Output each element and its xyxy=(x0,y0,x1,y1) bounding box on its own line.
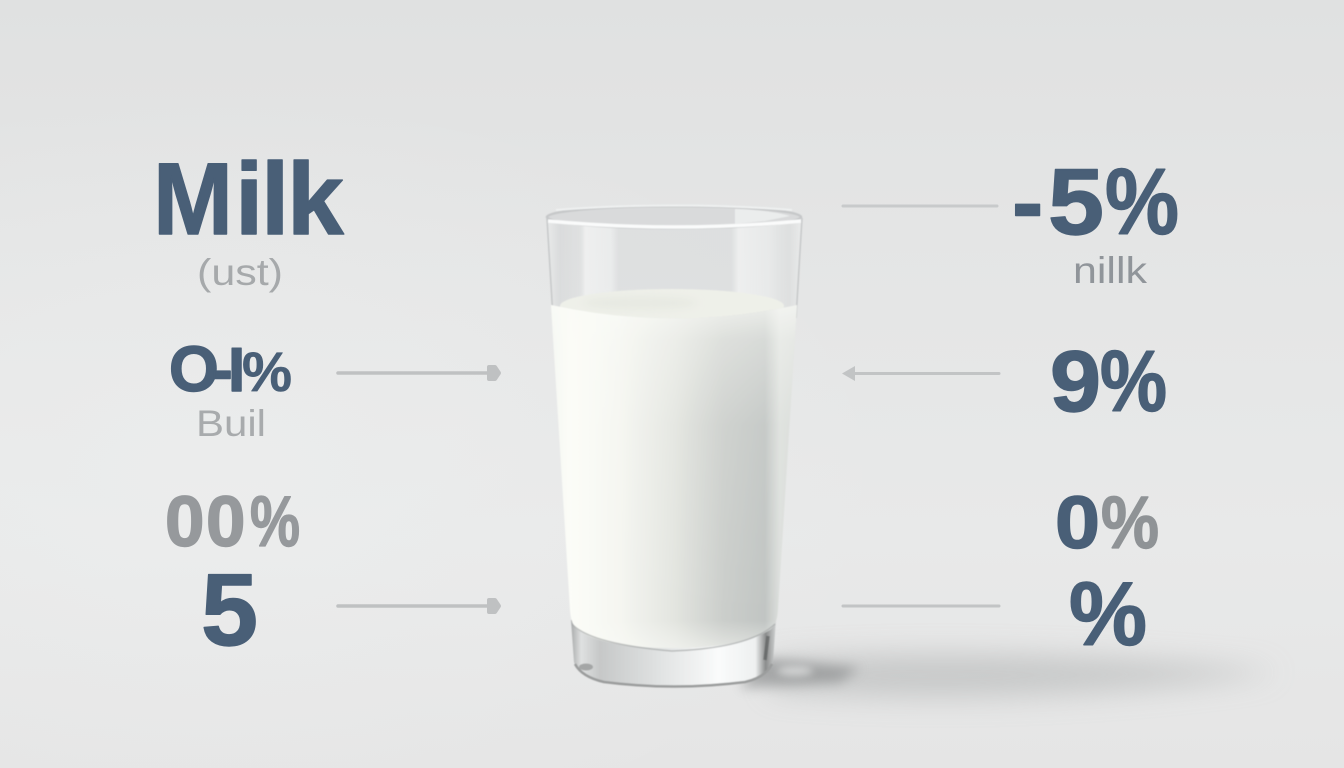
stat: 9%: 9 xyxy=(1050,334,1101,430)
stat: 9%: % xyxy=(1100,334,1167,430)
stat: O-I% xyxy=(169,333,292,405)
stat: -5%: - xyxy=(1012,149,1043,254)
label: Buil: Buil xyxy=(196,403,266,444)
stat: O-I%: -I xyxy=(212,336,245,405)
panel: left statistics xyxy=(153,142,344,667)
stat: -5%: 5 xyxy=(1048,149,1104,254)
stat: O-I%: O xyxy=(169,333,219,405)
icon: glass of milk xyxy=(547,206,802,686)
glass shadow xyxy=(740,654,1280,697)
arrow: middle right pointing to glass xyxy=(842,366,999,381)
arrow: upper left pointing to glass xyxy=(338,367,499,379)
arrow: lower left pointing to glass xyxy=(338,600,499,612)
stat: 9% xyxy=(1050,334,1167,430)
panel: right statistics xyxy=(1012,149,1179,665)
stat: 00% xyxy=(165,483,300,562)
heading: Milk: M xyxy=(153,142,233,256)
stat: 0%: % xyxy=(1101,481,1159,564)
glass base xyxy=(571,620,776,686)
heading: Milk xyxy=(153,142,344,256)
heading: Milk: ilk xyxy=(235,142,344,256)
stat: %: % xyxy=(1069,565,1147,665)
base highlights xyxy=(572,624,775,670)
stat: -5%: % xyxy=(1105,149,1179,254)
stat: 00%: 00 xyxy=(165,483,246,562)
label: nillk: nillk xyxy=(1073,250,1148,291)
stat: 0% xyxy=(1055,481,1159,564)
glass upper wall xyxy=(547,218,802,320)
connector line: upper right xyxy=(843,204,997,208)
stat: 00%: % xyxy=(250,483,300,562)
connector line: lower right xyxy=(843,604,999,608)
stat: 5: 5 xyxy=(201,553,258,667)
stat: O-I%: % xyxy=(242,340,292,403)
milk body xyxy=(551,289,797,648)
stat: 0%: 0 xyxy=(1055,481,1100,564)
stat: -5% xyxy=(1012,149,1179,254)
glass rim xyxy=(547,206,801,228)
label: (ust): (ust) xyxy=(197,252,283,293)
